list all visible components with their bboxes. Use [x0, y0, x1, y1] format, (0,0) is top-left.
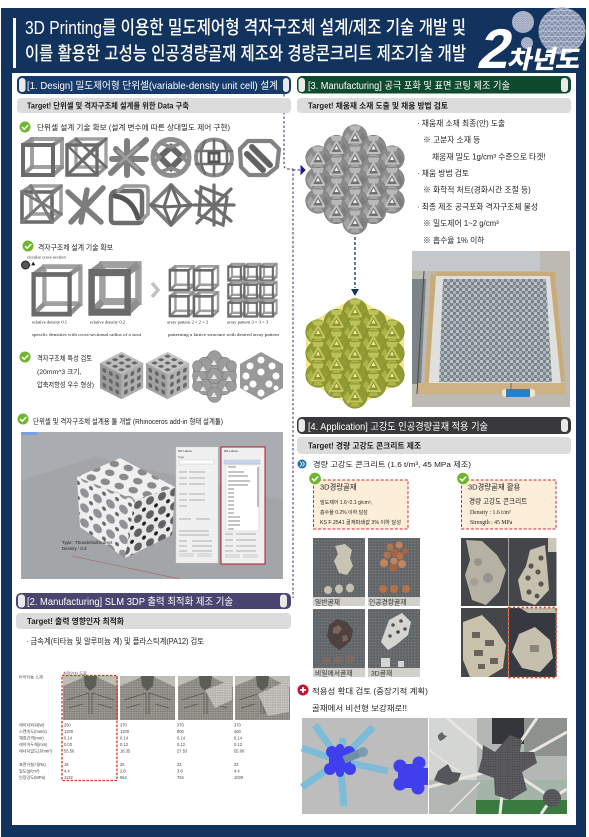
callout: 3D lightweight aggregate: 흡수율 0.2% 이하 달성 [320, 509, 368, 516]
parameter values: 0.14 [234, 736, 243, 740]
photo: non-fired aggregate: 비일에서골재 [315, 668, 353, 678]
callout: concrete application [462, 480, 556, 529]
dialog: settings: RD Lattice [178, 449, 192, 453]
text: filler notes: · 채움재 소재 최종(안) 도출 [417, 118, 505, 128]
heading: section 4 [297, 417, 571, 434]
table labels: 인장강도(MPa) [19, 774, 46, 780]
parameter values: 0.14 [64, 736, 73, 740]
photo: 3D aggregate: 3D골재 [371, 670, 392, 678]
target: section 3: Target! 채움재 소재 도출 및 채움 방법 검토 [308, 100, 449, 110]
callout: 3D lightweight aggregate: 밀도제어 1.6~2.1 g/cm³, [320, 499, 372, 506]
parameter values: 23 [177, 762, 182, 767]
callout: concrete application: Strength : 45 MPa [470, 520, 513, 526]
heading: section 2 [16, 593, 291, 609]
parameter values: 0.14 [120, 736, 129, 740]
parameter values: 16 [64, 762, 69, 767]
parameter values: 794 [177, 775, 185, 780]
text: filler notes: 채움재 밀도 1g/cm³ 수준으로 타겟! [432, 152, 546, 162]
icon: green check 5 [309, 473, 321, 484]
icon: green check 1 [20, 122, 30, 132]
parameter values: 26 [120, 762, 125, 767]
text: filler notes: · 채움 방법 검토 [417, 168, 469, 178]
photo: artificial lightweight aggregate: 인공경량골재 [369, 598, 407, 606]
photo: non-fired aggregate [313, 609, 365, 678]
parameter values: 55.06 [234, 748, 245, 754]
printed lattice block 1 [100, 352, 143, 399]
density cube 0.1 [34, 267, 80, 314]
parameter values: 27.53 [177, 748, 188, 754]
table labels: 스캔속도(mm/s) [19, 728, 47, 734]
icon: green check 4 [18, 414, 28, 424]
parameter values [64, 722, 245, 780]
model label [62, 540, 113, 551]
parameter values: 18.35 [120, 748, 131, 754]
callout: concrete application: 경량 고강도 콘크리트 [469, 496, 527, 506]
print sample photos [63, 676, 290, 720]
connector node [324, 744, 356, 777]
text: filler notes [417, 118, 546, 245]
parameter values: 370 [234, 722, 242, 728]
text: filler notes: ※ 화학적 처트(경화시간 조절 등) [423, 184, 531, 194]
photo: 3D aggregate [368, 609, 420, 678]
decorative lattice spheres [512, 8, 586, 54]
text: tool development: 단위셀 및 격자구조체 설계용 툴 개발 (Rhinoceros add-in 형태 설계툴) [33, 416, 223, 426]
title line 1: 3D Printing를 이용한 밀도제어형 격자구조체 설계/제조 기술 개발 및 [25, 17, 466, 38]
callout: 3D lightweight aggregate [314, 480, 408, 529]
heading: section 1: [1. Design] 밀도제어형 단위셀(variable-density unit cell) 설계 [27, 79, 278, 92]
photo: concrete specimen 4 [509, 608, 556, 677]
photo: concrete specimen 2 [509, 538, 556, 606]
parameter values: 370 [120, 722, 128, 728]
captions under cubes: specific densities with cross-sectional radius of a strut [32, 332, 142, 337]
heading: section 1 [17, 76, 291, 94]
text: scope expansion: 골재에서 비선형 보강재로!! [312, 703, 407, 713]
printed lattice block 3 [192, 351, 236, 402]
parameter values: 400 [234, 729, 242, 734]
icon: circular section [22, 261, 35, 269]
icon: red plus [298, 684, 308, 696]
table labels [19, 670, 87, 780]
badge: 2차년도: 차년도 [506, 46, 584, 74]
model label: Density : 0.3 [62, 546, 87, 551]
text: scope expansion: 적용성 확대 검토 (중장기적 계획) [312, 686, 428, 696]
dialog: type list with red outline [221, 447, 265, 564]
badge: 2차년도 [473, 19, 584, 81]
captions under cubes [32, 320, 280, 337]
render: rods and node connector [302, 718, 428, 814]
text: lattice properties: 격자구조체 특성 검토 [37, 354, 92, 362]
target: section 1: Target! 단위셀 및 격자구조체 설계를 위한 Data 구축 [27, 100, 190, 110]
printed lattice block 2 [146, 352, 189, 399]
arrow: into section 3 [301, 166, 305, 174]
icon: green check 2 [22, 240, 34, 252]
cell: X rods [68, 188, 103, 222]
parameter values: 250 [64, 722, 72, 728]
icon: green check 6 [457, 473, 469, 484]
photo: printed node on truss [429, 718, 567, 814]
parameter values: 2.8 [120, 768, 126, 774]
callout: 3D lightweight aggregate: KS F 2541 골재파쇄값 3% 이하 달성 [320, 519, 401, 526]
text: unit cell design: 단위셀 설계 기술 확보 (설계 변수에 따른 상대밀도 제어 구현) [37, 122, 230, 132]
target: section 4 [297, 437, 571, 454]
target: section 1 [17, 98, 291, 113]
photo: ordinary aggregate [313, 538, 365, 606]
title banner [13, 17, 466, 68]
cell: cube with body diagonals [22, 186, 61, 222]
parameter values: 564 [120, 775, 128, 780]
printed lattice block 4 [240, 352, 283, 400]
parameter values: 0.03 [64, 742, 73, 747]
dialog: settings: Type [178, 455, 185, 459]
captions under cubes: relative density 0.2 [90, 320, 126, 324]
table labels: 레이저파워(W) [19, 722, 45, 728]
label: circular cross section: circular cross section [27, 254, 66, 260]
text: filler notes: ※ 밀도제어 1~2 g/cm³ [423, 218, 499, 228]
photo: concrete specimen 1 [461, 538, 508, 606]
callout: 3D lightweight aggregate: 3D경량골재 [320, 482, 357, 492]
captions under cubes: array pattern 2 × 2 × 2 [167, 320, 209, 324]
highlighted specimen outline [508, 608, 556, 678]
parameter values: 4.4 [234, 768, 240, 774]
detached node [394, 756, 428, 794]
table labels: 타이타늄 소재 [19, 674, 43, 680]
captions under cubes: patterning a lattice structure with desired array pattern [168, 332, 280, 337]
heading: section 3 [297, 76, 571, 94]
parameter values: 1200 [120, 729, 130, 734]
target: section 3 [297, 98, 571, 113]
captions under cubes: array pattern 3 × 3 × 3 [227, 320, 269, 324]
density cube 0.2 [92, 265, 138, 312]
callout: concrete application: 3D경량골재 활용 [468, 482, 520, 492]
cell: rounded frame [111, 186, 148, 223]
callout: concrete application: Density : 1.6 t/m³ [470, 510, 511, 516]
model label: Type : ThunderboltSubset [62, 540, 113, 545]
heading: section 3: [3. Manufacturing] 공극 포화 및 표면 코팅 제조 기술 [308, 80, 510, 92]
heading: section 2: [2. Manufacturing] SLM 3DP 출력 최적화 제조 기술 [27, 596, 233, 608]
parameter values: 0.12 [177, 742, 186, 747]
parameter values: 0.14 [177, 736, 186, 740]
badge: 2차년도: 2 [473, 19, 519, 81]
array 2x2x2 lattice [170, 266, 218, 316]
text: scope expansion [312, 686, 428, 713]
icon: green check 3 [20, 352, 30, 362]
parameter values: 55.56 [64, 748, 75, 754]
cell: star lattice [194, 185, 234, 225]
cell: octahedron [151, 185, 191, 225]
parameter values: 0.12 [234, 742, 243, 747]
text: filler notes: · 최종 제조 공극포화 격자구조체 물성 [417, 202, 538, 212]
3D lattice model [77, 458, 175, 558]
text: lattice properties: (20mm^3 크기, [37, 367, 82, 376]
unit cell row 1 [23, 139, 279, 176]
parameter values: 0.12 [120, 742, 129, 747]
captions under cubes: relative density 0.1 [32, 320, 68, 324]
photo: filled lattice panel in frame [412, 251, 570, 407]
screenshot: Rhinoceros lattice tool [21, 432, 283, 579]
cell: rhombicuboctahedron [196, 140, 232, 176]
table: SLM print parameters [19, 670, 290, 780]
table labels: 최적인자 도출 [63, 670, 87, 676]
text: lattice design: 격자구조체 설계 기술 확보 [38, 242, 113, 252]
parameter values: 370 [177, 722, 185, 728]
table labels: 레이어두께(mm) [19, 741, 48, 747]
photo: artificial lightweight aggregate [368, 538, 420, 606]
dashed flow connector [284, 94, 301, 598]
parameter values: 1132 [64, 775, 74, 780]
table labels: 표면거칠기(Ra) [19, 761, 46, 767]
title line 2: 이를 활용한 고성능 인공경량골재 제조와 경량콘크리트 제조기술 개발 [25, 43, 466, 64]
optimal column highlight [62, 676, 117, 780]
text: lattice properties [37, 354, 94, 389]
cell: truncated octahedron [153, 140, 189, 176]
text: filler notes: ※ 고분자 소재 등 [423, 136, 480, 144]
unit cell row 2 [22, 185, 234, 225]
cell: simple cube [23, 139, 62, 175]
array 3x3x3 lattice [228, 264, 277, 316]
parameter values: 23 [234, 762, 239, 767]
text: lattice properties: 압축저항성 우수 형상) [37, 380, 94, 389]
dialog: type list with red outline: RD Lattice [224, 449, 238, 453]
target: section 2: Target! 출력 영향인자 최적화 [27, 616, 125, 626]
lattice cluster: yellow filled [306, 297, 404, 408]
parameter values: 4.4 [64, 768, 70, 774]
icon: double chevron badge [298, 460, 306, 468]
cell: crossed rods [111, 140, 146, 175]
text: concrete goal: 경량 고강도 콘크리트 (1.6 t/m³, 45 MPa 제조) [313, 459, 471, 469]
photo: concrete specimen 3 [461, 608, 508, 677]
heading: section 4: [4. Application] 고강도 인공경량골재 적용 기술 [308, 420, 488, 433]
table labels: 에너지밀도(J/mm³) [19, 748, 53, 754]
lattice cluster: gray hollow [306, 125, 404, 234]
parameter values: 800 [177, 729, 185, 734]
photo: ordinary aggregate: 일반골재 [315, 598, 340, 606]
target: section 2 [16, 613, 291, 629]
chevron arrow [152, 283, 158, 297]
table labels: 밀도(g/cm³) [19, 768, 40, 774]
table labels: 해칭간격(mm) [19, 734, 44, 740]
parameter values: 1200 [64, 729, 74, 734]
text: materials reviewed: · 금속계(티타늄 및 알루미늄 계) 및 플라스틱계(PA12) 검토 [26, 636, 204, 646]
cell: rounded cube with band [240, 141, 279, 175]
target: section 4: Target! 경량 고강도 콘크리트 제조 [308, 440, 422, 450]
cell: cube with X braces [67, 139, 106, 175]
parameter values: 1039 [234, 775, 244, 780]
dialog: settings [176, 447, 218, 563]
text: filler notes: ※ 흡수율 1% 이하 [423, 235, 484, 245]
parameter values: 3.8 [177, 768, 183, 774]
arrow: down to filled lattice [351, 237, 359, 296]
